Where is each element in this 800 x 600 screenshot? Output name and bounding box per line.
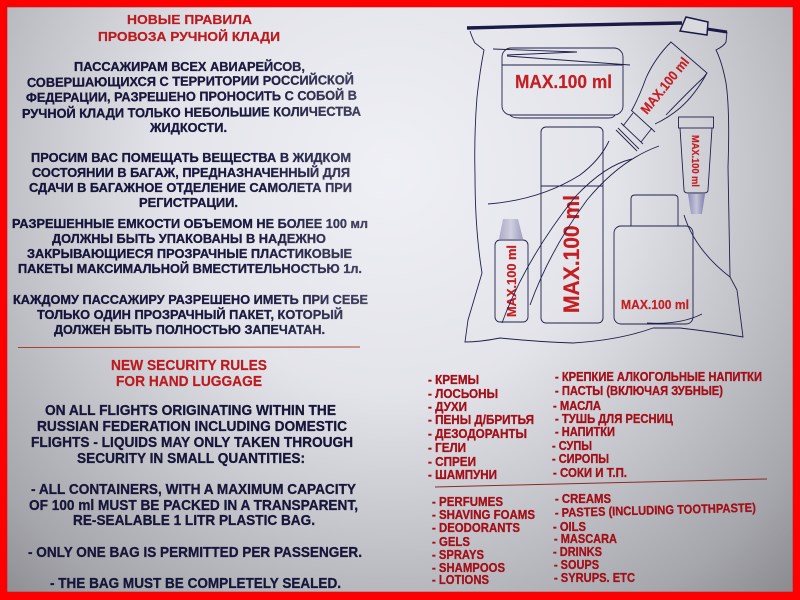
small bottle <box>495 219 528 322</box>
heading: english rules: FOR HAND LUGGAGE <box>116 374 262 390</box>
text block: english paragraph 2: OF 100 ml MUST BE PACKED IN A TRANSPARENT, <box>29 498 358 514</box>
heading: russian rules: ПРОВОЗА РУЧНОЙ КЛАДИ <box>98 29 280 44</box>
text block: russian paragraph 1: РУЧНОЙ КЛАДИ ТОЛЬКО НЕБОЛЬШИЕ КОЛИЧЕСТВА <box>22 104 362 121</box>
text block: russian paragraph 3 <box>12 216 368 276</box>
tube <box>678 117 714 214</box>
text block: russian paragraph 4: ТОЛЬКО ОДИН ПРОЗРАЧНЫЙ ПАКЕТ, КОТОРЫЙ <box>37 307 343 322</box>
text block: russian paragraph 4: КАЖДОМУ ПАССАЖИРУ РАЗРЕШЕНО ИМЕТЬ ПРИ СЕБЕ <box>13 292 368 307</box>
heading: russian rules: НОВЫЕ ПРАВИЛА <box>127 12 253 27</box>
bag fold lines <box>488 141 730 323</box>
illustration: resealable plastic bag with containers <box>465 17 743 343</box>
list: russian liquids, column 2 <box>552 370 762 480</box>
square bottle: MAX.100 ml <box>621 297 689 312</box>
heading: english rules <box>111 358 267 390</box>
zip slider <box>680 17 708 35</box>
text block: russian paragraph 1 <box>22 59 362 135</box>
list: russian liquids, column 2: - ТУШЬ ДЛЯ РЕСНИЦ <box>555 412 674 426</box>
list: russian liquids, column 1: - ДЕЗОДОРАНТЫ <box>428 427 527 441</box>
square bottle <box>614 195 693 324</box>
text block: english paragraph 2: RE-SEALABLE 1 LITR PLASTIC BAG. <box>73 513 315 529</box>
text block: russian paragraph 3: РАЗРЕШЕННЫЕ ЕМКОСТИ ОБЪЕМОМ НЕ БОЛЕЕ 100 мл <box>12 216 368 231</box>
list: english liquids, column 2: - OILS <box>553 520 586 534</box>
list: russian liquids, column 1: - ГЕЛИ <box>428 441 466 455</box>
list: russian liquids, column 1: - ШАМПУНИ <box>428 468 497 482</box>
text block: english paragraph 1: RUSSIAN FEDERATION INCLUDING DOMESTIC <box>37 419 347 435</box>
text block: russian paragraph 4 <box>13 292 368 337</box>
list: russian liquids, column 2: - ПАСТЫ (ВКЛЮЧАЯ ЗУБНЫЕ) <box>555 384 723 398</box>
text block: russian paragraph 2: ПРОСИМ ВАС ПОМЕЩАТЬ ВЕЩЕСТВА В ЖИДКОМ <box>31 150 351 165</box>
list: russian liquids, column 1: - СПРЕИ <box>428 455 476 469</box>
text block: english paragraph 1: ON ALL FLIGHTS ORIGINATING WITHIN THE <box>45 403 336 419</box>
list: english liquids, column 1: - DEODORANTS <box>432 521 520 535</box>
list: english liquids, column 1: - PERFUMES <box>432 495 503 509</box>
list: russian liquids, column 1: - ЛОСЬОНЫ <box>428 387 498 401</box>
text block: russian paragraph 2 <box>29 150 352 210</box>
list: english liquids, column 1: - LOTIONS <box>432 573 489 587</box>
text block: russian paragraph 2: РЕГИСТРАЦИИ. <box>139 195 238 210</box>
list: russian liquids, column 2: - СОКИ И Т.П. <box>553 466 627 480</box>
text block: english bag limit: - ONLY ONE BAG IS PERMITTED PER PASSENGER. <box>28 545 362 561</box>
text block: russian paragraph 1: ФЕДЕРАЦИИ, РАЗРЕШЕНО ПРОНОСИТЬ С СОБОЙ В <box>26 88 357 105</box>
text block: russian paragraph 2: СДАЧИ В БАГАЖНОЕ ОТДЕЛЕНИЕ САМОЛЕТА ПРИ <box>29 180 352 195</box>
heading: russian rules <box>98 12 280 44</box>
text block: russian paragraph 1: ЖИДКОСТИ. <box>149 120 227 135</box>
tall bottle: MAX.100 ml <box>559 195 584 313</box>
text block: english paragraph 2 <box>29 482 358 529</box>
bag outline <box>465 31 743 343</box>
text block: english paragraph 1: SECURITY IN SMALL QUANTITIES: <box>77 451 305 467</box>
jar <box>493 48 630 118</box>
list: english liquids, column 2: - MASCARA <box>554 532 617 546</box>
list: russian liquids, column 1: - ДУХИ <box>428 400 467 414</box>
list: russian liquids, column 2: - МАСЛА <box>553 399 601 413</box>
list: english liquids, column 2: - SOUPS <box>554 558 599 572</box>
text block: russian paragraph 4: ДОЛЖЕН БЫТЬ ПОЛНОСТЬЮ ЗАПЕЧАТАН. <box>54 322 325 337</box>
list: russian liquids, column 1 <box>428 373 534 482</box>
text block: russian paragraph 1: СОВЕРШАЮЩИХСЯ С ТЕРРИТОРИИ РОССИЙСКОЙ <box>27 72 354 90</box>
text block: english paragraph 2: - ALL CONTAINERS, WITH A MAXIMUM CAPACITY <box>31 482 356 498</box>
list: english liquids, column 1: - GELS <box>432 535 470 549</box>
list: russian liquids, column 2: - СИРОПЫ <box>552 452 609 466</box>
text block: russian paragraph 3: ЗАКРЫВАЮЩИЕСЯ ПРОЗРАЧНЫЕ ПЛАСТИКОВЫЕ <box>27 246 352 261</box>
list: english liquids, column 1 <box>432 495 535 587</box>
list: russian liquids, column 2: - НАПИТКИ <box>555 425 615 439</box>
angled bottle: MAX.100 ml <box>638 55 692 117</box>
jar: MAX.100 ml <box>515 72 612 92</box>
list: russian liquids, column 1: - КРЕМЫ <box>428 373 479 387</box>
heading: english rules: NEW SECURITY RULES <box>111 358 267 374</box>
text block: english paragraph 1: FLIGHTS - LIQUIDS MAY ONLY TAKEN THROUGH <box>31 435 353 451</box>
text block: russian paragraph 3: ДОЛЖНЫ БЫТЬ УПАКОВАНЫ В НАДЕЖНО <box>52 231 326 246</box>
list: english liquids, column 2 <box>553 492 756 585</box>
list: english liquids, column 2: - CREAMS <box>555 492 611 506</box>
list: russian liquids, column 2: - СУПЫ <box>552 439 592 453</box>
text block: english paragraph 1 <box>31 403 353 467</box>
list: russian liquids, column 1: - ПЕНЫ Д/БРИТЬЯ <box>428 413 534 427</box>
text block: english sealing rule: - THE BAG MUST BE COMPLETELY SEALED. <box>50 576 341 592</box>
list: russian liquids, column 2: - КРЕПКИЕ АЛКОГОЛЬНЫЕ НАПИТКИ <box>555 370 762 384</box>
small bottle: MAX.100 ml <box>504 245 519 317</box>
tall bottle <box>541 127 603 323</box>
angled bottle <box>616 42 707 151</box>
tube: MAX.100 ml <box>689 135 701 187</box>
list: english liquids, column 2: - PASTES (INCLUDING TOOTHPASTE) <box>555 501 756 520</box>
text block: russian paragraph 1: ПАССАЖИРАМ ВСЕХ АВИАРЕЙСОВ, <box>74 59 305 74</box>
list: english liquids, column 2: - SYRUPS. ETC <box>554 571 635 585</box>
list: english liquids, column 1: - SHAVING FOAMS <box>432 508 535 522</box>
text block: russian paragraph 2: СОСТОЯНИИ В БАГАЖ, ПРЕДНАЗНАЧЕННЫЙ ДЛЯ <box>32 165 350 180</box>
list: english liquids, column 1: - SPRAYS <box>432 548 484 562</box>
zip seal <box>467 23 682 28</box>
list: english liquids, column 1: - SHAMPOOS <box>432 561 505 575</box>
list: english liquids, column 2: - DRINKS <box>553 545 602 559</box>
text block: russian paragraph 3: ПАКЕТЫ МАКСИМАЛЬНОЙ ВМЕСТИТЕЛЬНОСТЬЮ 1л. <box>18 261 362 276</box>
